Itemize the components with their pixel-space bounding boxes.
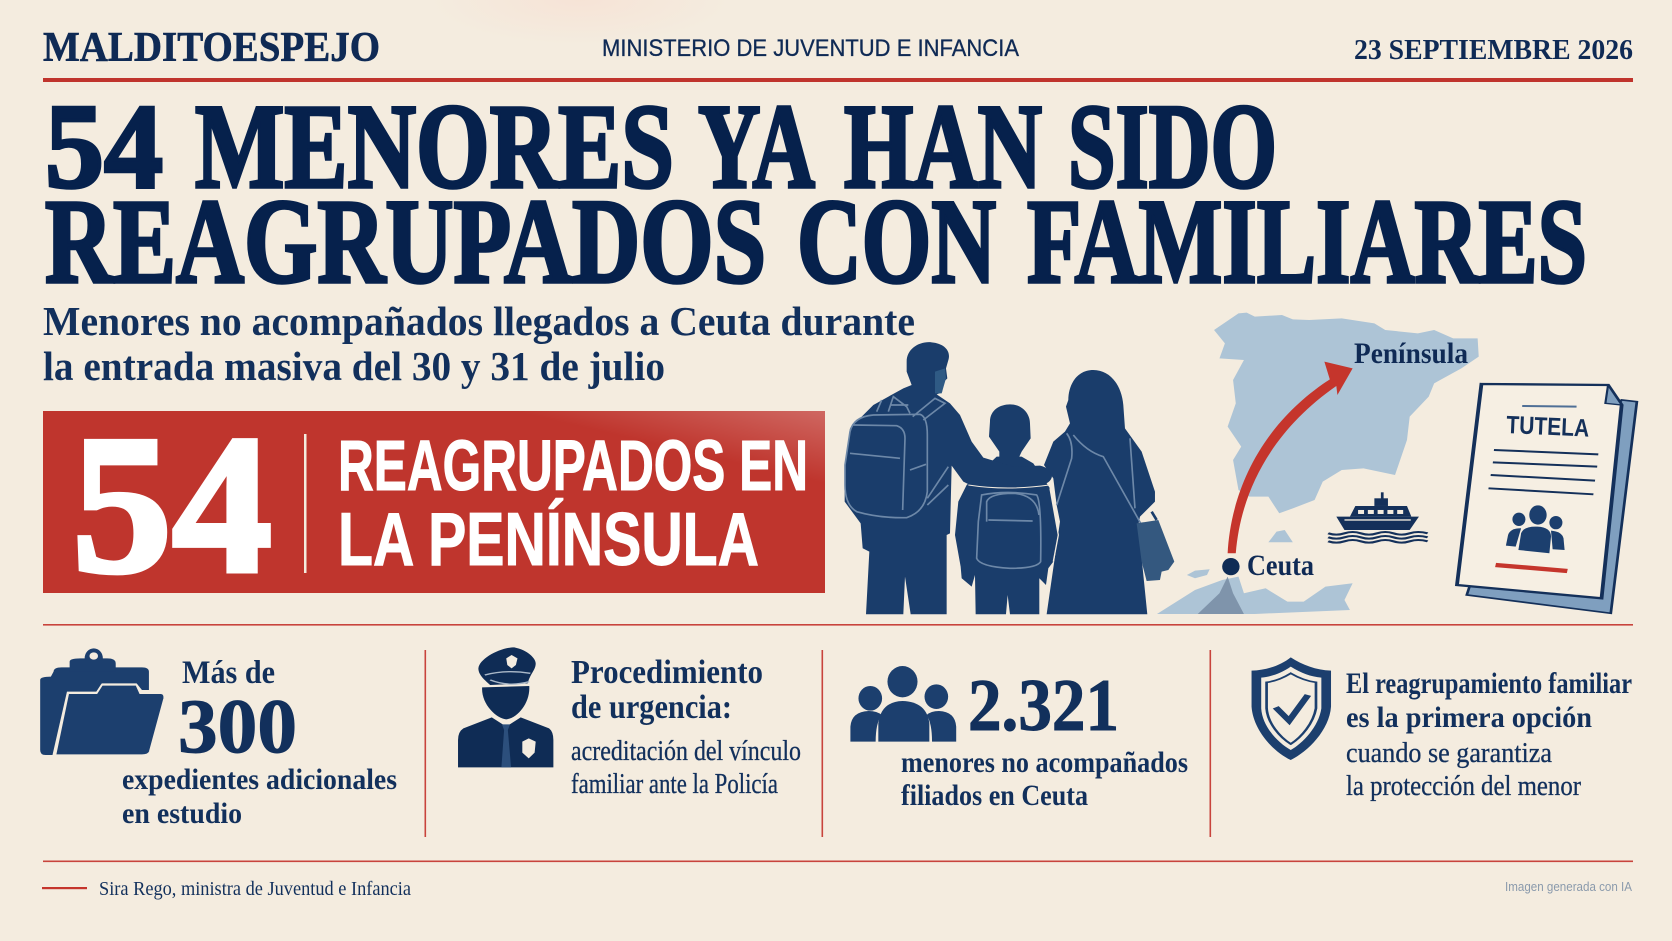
stat 1: expedientes: en estudio	[122, 797, 242, 830]
document title: TUTELA	[1506, 411, 1590, 443]
icon: ferry	[1328, 492, 1428, 543]
islet and African coast	[1157, 530, 1353, 614]
title	[45, 80, 1587, 309]
title: 54	[45, 80, 163, 214]
brand name: MALDITOESPEJO	[43, 25, 380, 71]
illustration: family silhouettes	[845, 342, 1174, 614]
subtitle: Menores no acompañados llegados a Ceuta durante	[43, 298, 915, 344]
title: MENORES	[195, 80, 674, 214]
callout text: REAGRUPADOS EN	[338, 427, 808, 506]
text: 2.321	[968, 665, 1119, 747]
Iberian peninsula	[1214, 313, 1479, 513]
stat 4: protection	[1252, 657, 1632, 802]
stat 4: protection: la protección del menor	[1346, 770, 1581, 802]
stat 4: protection: es la primera opción	[1346, 701, 1592, 734]
label: Ceuta: Ceuta	[1247, 549, 1314, 582]
text: Más de	[182, 655, 275, 691]
stat 2: procedimiento de urgencia: familiar ante la Policía	[571, 769, 778, 800]
footer credit: Imagen generada con IA	[1505, 879, 1632, 894]
stat 1: expedientes: expedientes adicionales	[122, 763, 397, 796]
Ceuta dot	[1222, 558, 1240, 575]
header	[43, 25, 1633, 71]
stat 3: 2.321 menores	[850, 665, 1188, 812]
arrow	[1228, 362, 1353, 553]
red callout: 54 reagrupados	[43, 395, 825, 614]
icon: folder	[40, 648, 165, 755]
subtitle: la entrada masiva del 30 y 31 de julio	[43, 343, 665, 389]
map: Ceuta to Peninsula	[1157, 313, 1479, 614]
stat 1: expedientes	[40, 648, 397, 830]
child	[955, 404, 1058, 614]
title: CON	[797, 175, 996, 309]
text: Procedimiento	[571, 654, 763, 691]
stat 1: expedientes: 300	[178, 683, 297, 769]
footer source: Sira Rego, ministra de Juventud e Infancia	[99, 878, 411, 900]
label: Peninsula: Península	[1354, 337, 1468, 370]
red callout: 54 reagrupados: LA PENÍNSULA	[338, 497, 759, 581]
man	[845, 342, 1052, 614]
stat 3: 2.321 menores: filiados en Ceuta	[901, 779, 1088, 812]
stat 4: protection: cuando se garantiza	[1346, 737, 1552, 769]
icon: shield with check	[1252, 657, 1331, 760]
title: REAGRUPADOS	[45, 175, 766, 309]
icon: group of people	[850, 666, 956, 742]
title: YA	[698, 80, 815, 214]
ministry name: MINISTERIO DE JUVENTUD E INFANCIA	[602, 35, 1019, 62]
stat 2: procedimiento de urgencia: acreditación del vínculo	[571, 736, 801, 767]
icon: police officer	[458, 647, 553, 767]
subtitle	[43, 298, 915, 389]
stat 2: procedimiento de urgencia: de urgencia:	[571, 689, 732, 726]
icon: tutela document	[1457, 384, 1637, 613]
stat 3: 2.321 menores: menores no acompañados	[901, 746, 1188, 779]
date: 23 SEPTIEMBRE 2026	[1354, 34, 1633, 66]
title: HAN	[844, 80, 1042, 214]
callout number: 54	[72, 395, 272, 614]
title: SIDO	[1068, 80, 1277, 214]
stat 2: procedimiento de urgencia	[458, 647, 801, 800]
woman	[1044, 370, 1174, 614]
